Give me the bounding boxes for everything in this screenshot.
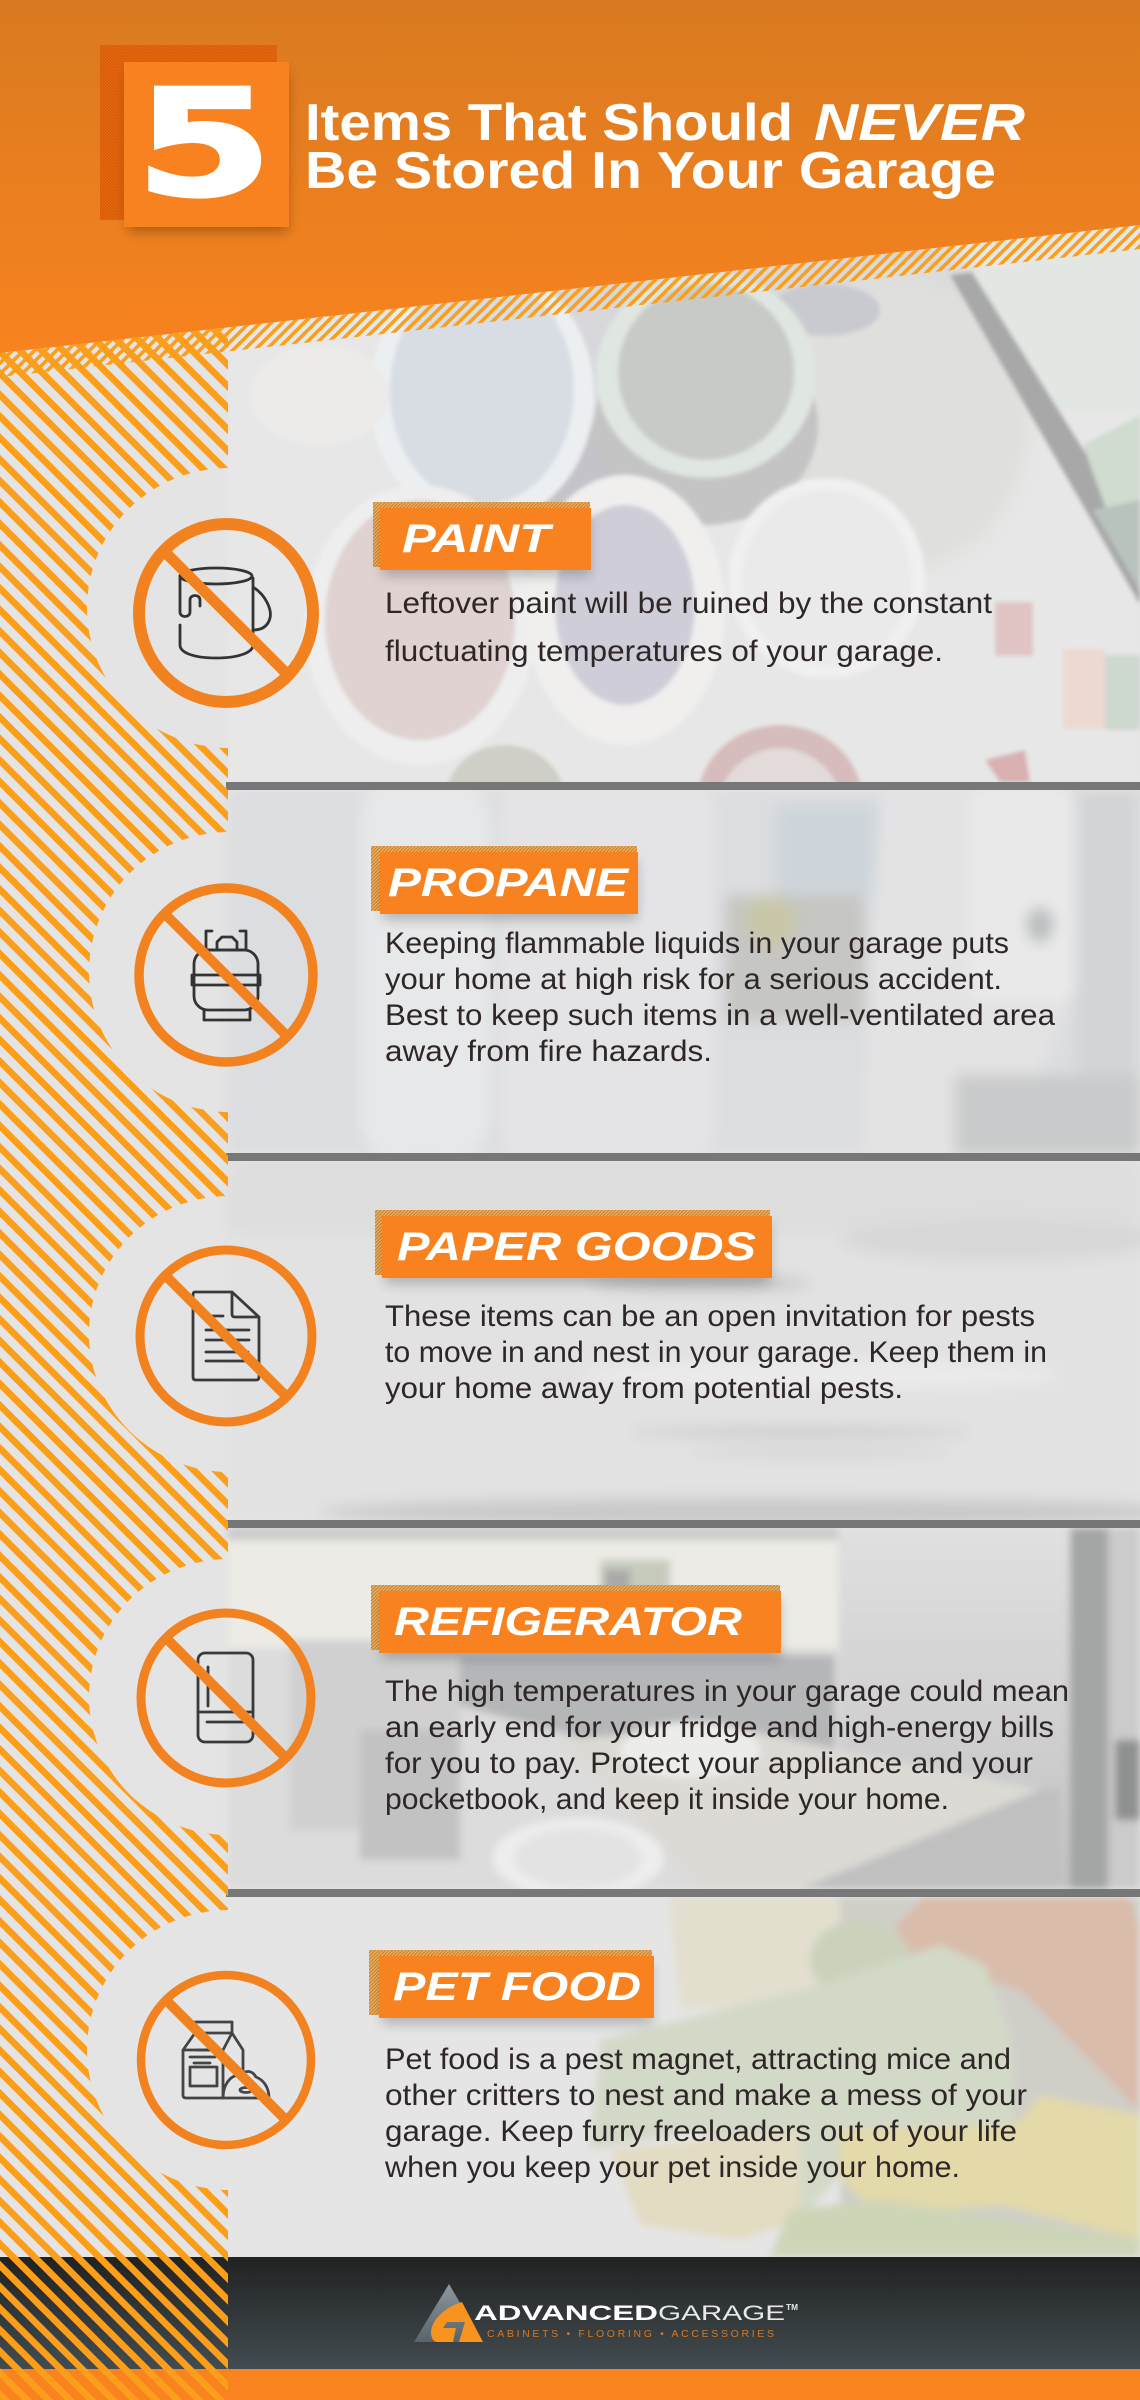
refrigerator label [371,1585,781,1659]
photo: kitchen [228,1528,1140,1898]
icon: no paper [140,1250,312,1422]
refrigerator text: an early end for your fridge and high-energy bills [385,1711,1054,1744]
icon: no refrigerator [141,1613,311,1783]
footer logo: TM [786,2303,798,2312]
propane text: Best to keep such items in a well-ventilated area [385,999,1055,1032]
photo: dog biscuits [589,1897,1140,2257]
paper goods text [385,1300,1047,1405]
pet food text: other critters to nest and make a mess of your [385,2079,1027,2112]
paint text: fluctuating temperatures of your garage. [385,635,943,668]
paint text [385,587,993,668]
footer logo [414,2284,798,2342]
refrigerator text: pocketbook, and keep it inside your home. [385,1783,949,1816]
paint label [373,502,591,576]
pet food text: garage. Keep furry freeloaders out of your life [385,2115,1017,2148]
paper goods text: your home away from potential pests. [385,1372,903,1405]
propane text: away from fire hazards. [385,1035,712,1068]
pet food text: when you keep your pet inside your home. [384,2151,960,2184]
photo: paint cans [310,248,1140,782]
propane text [385,927,1055,1068]
hatched diagonal band [0,225,1140,377]
title badge: 5 [135,59,273,231]
title: Items That Should [305,94,793,152]
refrigerator text: The high temperatures in your garage could mean [385,1675,1069,1708]
header background [0,0,1140,353]
title: Be Stored In Your Garage [305,142,996,200]
paper goods label [375,1210,772,1284]
pet food label [369,1950,654,2024]
propane label: PROPANE [388,861,630,905]
title [305,94,1026,200]
propane label [371,846,638,920]
paper goods text: These items can be an open invitation for pests [385,1300,1035,1333]
panel: paint [139,502,993,702]
panel: refrigerator [141,1585,1069,1816]
panel: pet food [141,1950,1027,2184]
icon: no propane [139,888,313,1062]
refrigerator text [385,1675,1069,1816]
footer logo: ADVANCED [474,2302,658,2325]
photo: paper sheets [328,1214,1140,1520]
propane text: Keeping flammable liquids in your garage puts [385,927,1009,960]
paint label: PAINT [402,517,555,561]
diagonal stripe panel [0,300,228,2400]
title: NEVER [814,94,1026,152]
propane text: your home at high risk for a serious accident. [385,963,1002,996]
title badge [100,45,289,232]
photo: propane tank and apron [228,780,1140,1160]
pet food text [384,2043,1027,2184]
refrigerator text: for you to pay. Protect your appliance and your [385,1747,1033,1780]
pet food text: Pet food is a pest magnet, attracting mice and [385,2043,1011,2076]
pet food label: PET FOOD [393,1965,641,2009]
footer [0,2257,1140,2400]
paper goods text: to move in and nest in your garage. Keep them in [385,1336,1047,1369]
panel: propane [139,846,1055,1068]
panel: paper goods [140,1210,1047,1422]
footer logo: GARAGE [658,2302,785,2325]
dividers [226,782,1140,1897]
icon: no paint can [139,524,313,702]
paper goods label: PAPER GOODS [397,1225,756,1269]
footer logo: CABINETS • FLOORING • ACCESSORIES [487,2328,774,2340]
refrigerator label: REFIGERATOR [394,1600,742,1644]
paint text: Leftover paint will be ruined by the constant [385,587,993,620]
icon: no pet food [141,1975,311,2145]
